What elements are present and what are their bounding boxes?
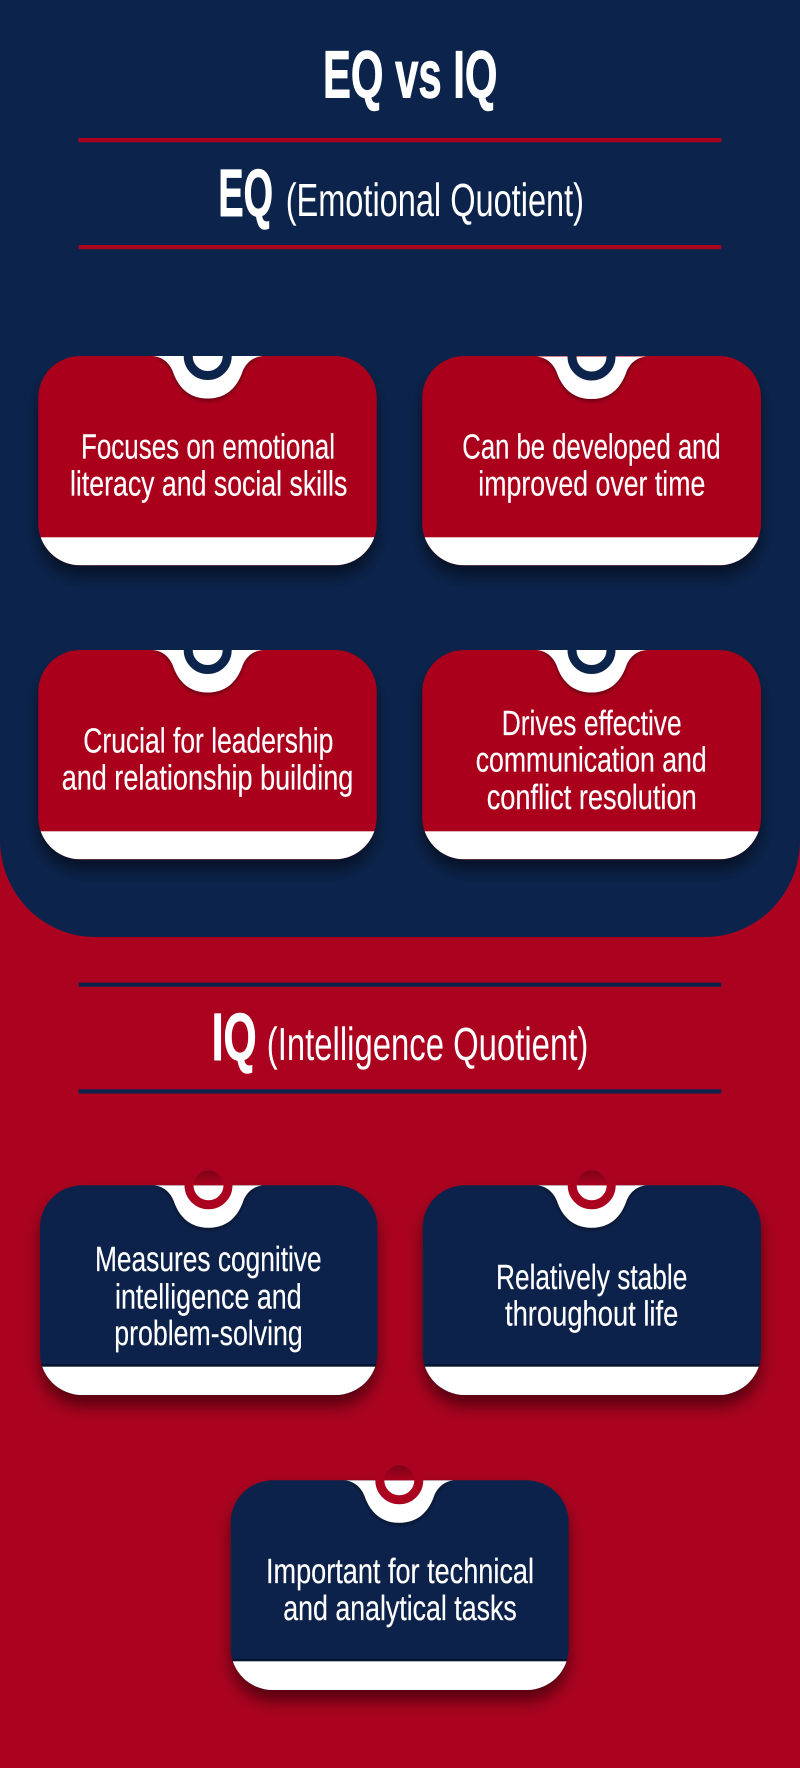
IQ heading block	[79, 983, 721, 1094]
card: Drives effective communication: Drives effective	[502, 704, 682, 743]
card: Focuses on emotional literacy: Focuses on emotional	[81, 427, 335, 466]
card: Can be developed: improved over time	[478, 465, 705, 504]
card: Important for technical: and analytical tasks	[283, 1589, 517, 1628]
panel: EQ navy background	[0, 0, 800, 937]
card: Crucial for leadership: Crucial for leadership	[83, 721, 333, 760]
card: Drives effective communication: communication and	[476, 741, 707, 780]
card: Crucial for leadership: and relationship building	[62, 758, 353, 797]
card: Focuses on emotional literacy: literacy and social skills	[70, 465, 347, 504]
card: Drives effective communication	[422, 630, 761, 859]
card: Relatively stable	[423, 1166, 761, 1395]
card: Can be developed	[422, 337, 761, 565]
EQ heading block: (Emotional Quotient)	[286, 174, 584, 226]
card: Measures cognitive intelligence	[40, 1166, 378, 1395]
card: Important for technical: Important for technical	[266, 1552, 534, 1591]
card: Drives effective communication: conflict resolution	[487, 778, 697, 817]
card: Focuses on emotional literacy	[38, 336, 377, 565]
card: Important for technical	[231, 1461, 569, 1690]
title: EQ vs IQ	[323, 38, 497, 113]
card: Relatively stable: Relatively stable	[496, 1258, 687, 1297]
card: Measures cognitive intelligence: problem-solving	[114, 1314, 303, 1353]
card: Relatively stable: throughout life	[505, 1295, 678, 1334]
card: Measures cognitive intelligence: Measures cognitive	[95, 1240, 322, 1279]
EQ heading block	[79, 138, 721, 249]
card: Measures cognitive intelligence: intelligence and	[115, 1277, 302, 1316]
IQ heading block: IQ	[212, 1000, 257, 1075]
card: Crucial for leadership	[38, 630, 377, 859]
EQ heading block: EQ	[218, 156, 273, 231]
IQ heading block: (Intelligence Quotient)	[267, 1018, 588, 1070]
